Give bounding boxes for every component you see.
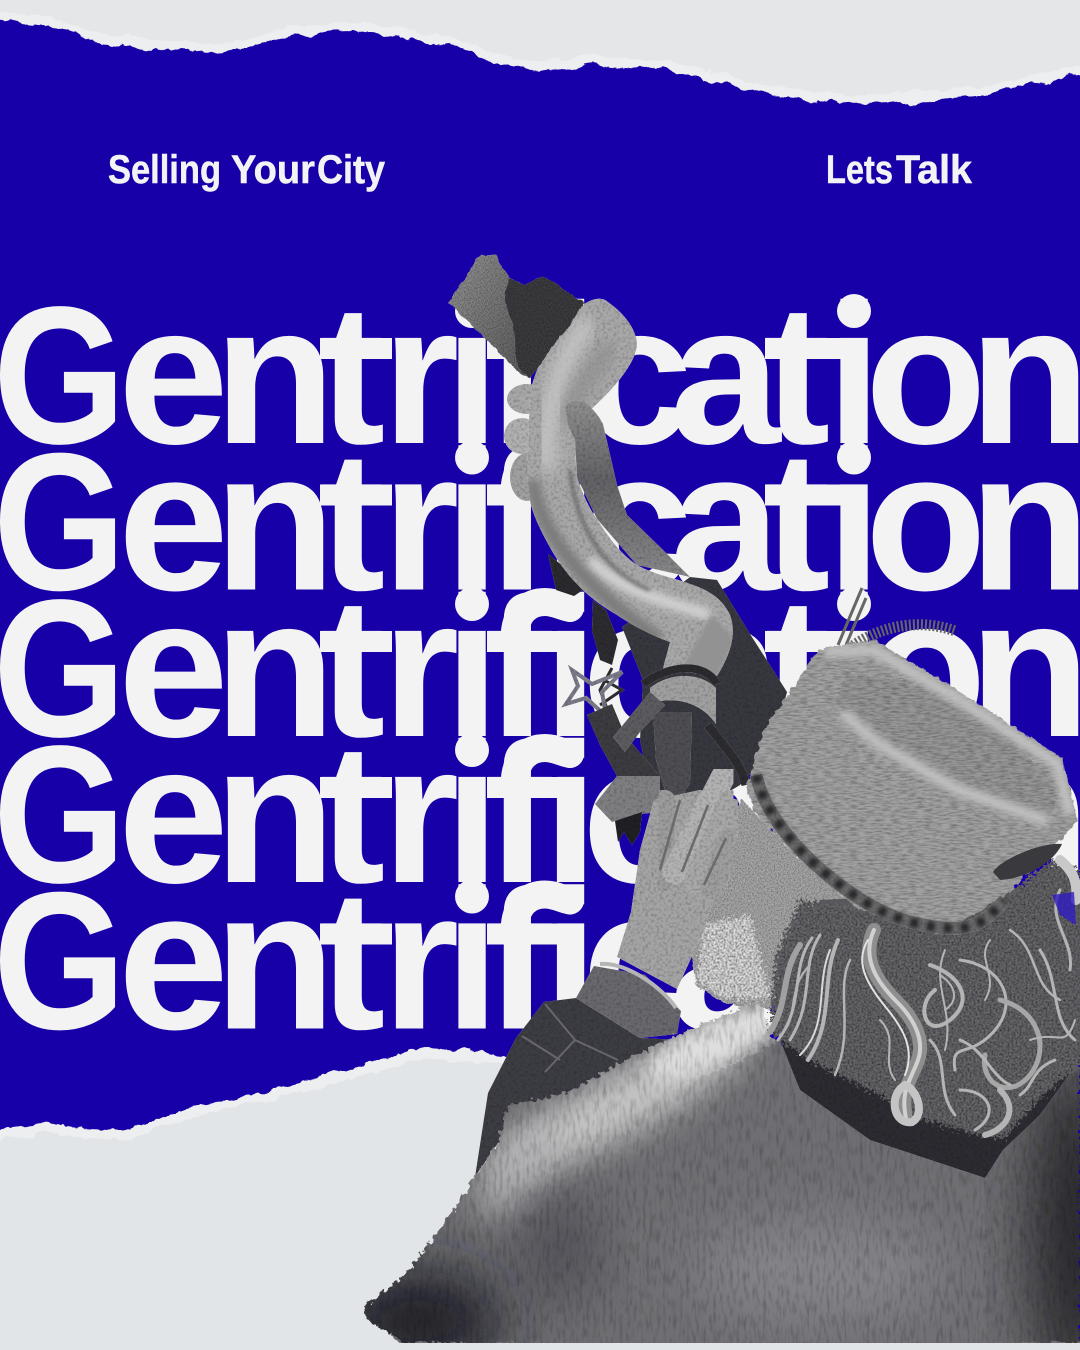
puffy jacket sleeve [475, 998, 680, 1177]
title row 3: entrification [118, 557, 1080, 779]
torn paper: top [0, 0, 1080, 104]
rope binding and lower horn [613, 668, 746, 814]
torn paper: bottom [0, 1048, 620, 1350]
heading: Lets Talk: Talk [896, 148, 973, 192]
leopard trim [756, 775, 1005, 928]
title row 5: entrification [118, 850, 1080, 1072]
hat patch [993, 844, 1062, 880]
heading: Selling Your City: City [317, 148, 386, 192]
knit cuff and watch [576, 964, 681, 1038]
photo cut-out: man blowing a shofar horn [335, 254, 1080, 1350]
title row 2: entrification [118, 410, 1080, 632]
gap of blue through hair [1052, 892, 1076, 925]
heading: Selling Your City: Selling [108, 148, 221, 192]
heading: Lets Talk [826, 148, 973, 192]
horn body [527, 299, 735, 680]
heading: Lets Talk: Lets [826, 148, 893, 192]
heading: Selling Your City: Your [231, 148, 315, 192]
title row 4: entrification [118, 703, 1080, 925]
hand holding horn [617, 775, 738, 989]
curly hair [770, 860, 1080, 1138]
heading: Selling Your City [108, 148, 386, 192]
fingers gripping the horn [504, 384, 547, 501]
face and beard [690, 798, 860, 1010]
dark jacket collar [780, 1000, 1080, 1178]
hat rim [825, 650, 1070, 821]
title row 1: entrification [118, 264, 1080, 486]
dark sleeve of raised arm [622, 577, 787, 815]
mouthpiece with dark wrapping [449, 254, 583, 378]
fur cape [335, 986, 1080, 1350]
hat crown [835, 672, 1062, 821]
bottom paper strip under figure [360, 1343, 1080, 1350]
hand behind horn with thumb [565, 400, 690, 577]
hat with feather [746, 588, 1078, 934]
chain and hanging charms [548, 554, 660, 845]
repeated title: Gentrification [0, 264, 1080, 1072]
